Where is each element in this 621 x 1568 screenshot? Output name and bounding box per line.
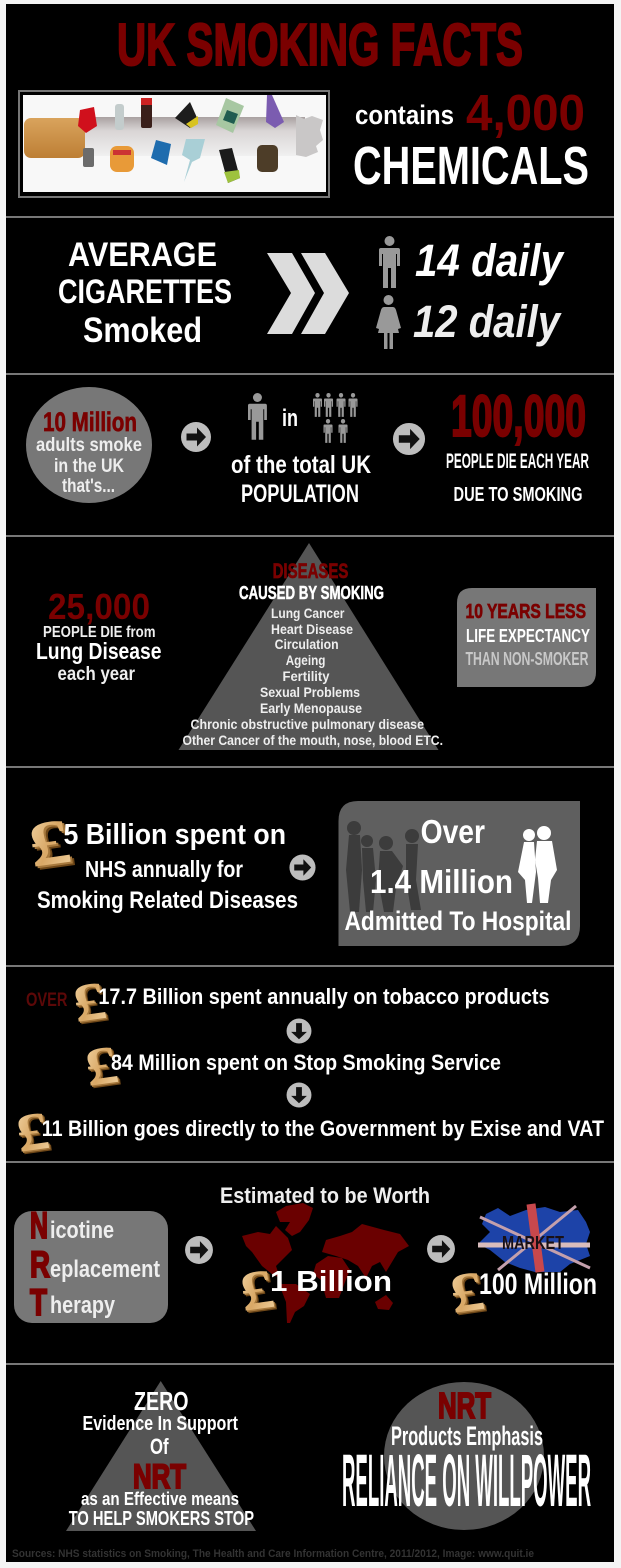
callout: reliance on willpower: NRT bbox=[438, 1385, 491, 1426]
triangle: zero evidence bbox=[66, 1381, 256, 1531]
triangle: diseases caused by smoking: Circulation bbox=[275, 636, 339, 652]
callout: nicotine replacement therapy: icotine bbox=[50, 1217, 114, 1244]
triangle: diseases caused by smoking: Lung Cancer bbox=[271, 605, 345, 621]
arrow: down bbox=[287, 1083, 311, 1107]
triangle: diseases caused by smoking: Sexual Problems bbox=[260, 684, 360, 700]
text: 17.7 billion on tobacco: 17.7 Billion spent annually on tobacco products bbox=[98, 984, 550, 1009]
panel: diseases bbox=[36, 543, 596, 750]
callout: reliance on willpower bbox=[342, 1382, 591, 1530]
icon: gold pound: £ bbox=[29, 809, 80, 885]
text: of the total UK population bbox=[231, 451, 371, 508]
callout: nicotine replacement therapy: eplacement bbox=[50, 1256, 160, 1283]
panel: NRT market bbox=[14, 1183, 597, 1329]
text: contains: contains bbox=[355, 100, 454, 130]
arrow bbox=[185, 1236, 213, 1264]
text: 84 million: 84 Million spent on Stop Smoking Service bbox=[111, 1050, 501, 1075]
text: sources: Sources: NHS statistics on Smoking, The Health and Care Information Centre, 2011/2012, Image: www.quit.ie bbox=[12, 1548, 534, 1560]
callout: admitted to hospital: Over bbox=[421, 813, 485, 850]
text: 4,000: 4,000 bbox=[466, 84, 585, 141]
arrow bbox=[289, 854, 316, 881]
panel: average cigarettes bbox=[58, 235, 565, 350]
text: 25,000 lung disease bbox=[36, 586, 162, 685]
callout: nicotine replacement therapy: N bbox=[30, 1205, 48, 1246]
arrow bbox=[393, 423, 425, 455]
text: 100,000 deaths bbox=[446, 384, 589, 506]
text: 5 billion spent bbox=[37, 819, 298, 914]
icon: gold pound: £ bbox=[12, 1100, 53, 1164]
icon: woman bbox=[376, 295, 401, 349]
callout: life expectancy bbox=[457, 588, 596, 687]
callout: nicotine replacement therapy: T bbox=[30, 1282, 47, 1323]
icon: gold pound: £ bbox=[83, 1035, 123, 1099]
icon: gold pound: £ bbox=[71, 971, 111, 1035]
callout: life expectancy: 10 YEARS LESS bbox=[466, 601, 586, 623]
icon: white couple bbox=[518, 826, 557, 903]
arrow: double chevron bbox=[267, 253, 349, 334]
text: average cigarettes smoked: Smoked bbox=[83, 311, 202, 350]
text: 5 billion spent: Smoking Related Diseases bbox=[37, 887, 298, 914]
icon: gold pound: £ bbox=[84, 1037, 125, 1100]
image: union flag market: MARKET bbox=[502, 1233, 564, 1253]
panel: chemicals bbox=[19, 84, 589, 197]
icon: dark silhouettes bbox=[346, 821, 421, 912]
icon: gold pound: £ bbox=[239, 1261, 281, 1326]
triangle: diseases caused by smoking: CAUSED BY SMOKING bbox=[239, 583, 384, 603]
text: 25,000 lung disease: Lung Disease bbox=[36, 638, 162, 664]
text: 25,000 lung disease: PEOPLE DIE from bbox=[43, 624, 156, 641]
callout: 10 million circle: that's... bbox=[62, 476, 115, 497]
triangle: diseases caused by smoking: Other Cancer of the mouth, nose, blood ETC. bbox=[182, 732, 443, 748]
triangle: diseases caused by smoking: DISEASES bbox=[273, 560, 348, 583]
text: average cigarettes smoked bbox=[58, 236, 232, 350]
image: union flag market bbox=[478, 1204, 590, 1272]
text: 12 daily: 12 daily bbox=[413, 296, 562, 347]
section dividers bbox=[6, 216, 614, 1365]
text: 5 billion spent: NHS annually for bbox=[85, 856, 243, 882]
panel: NHS spending bbox=[24, 801, 580, 946]
triangle: diseases caused by smoking: Fertility bbox=[282, 668, 330, 684]
triangle: diseases caused by smoking: Heart Disease bbox=[271, 621, 353, 637]
icon: one in seven people bbox=[248, 393, 358, 443]
text: average cigarettes smoked: CIGARETTES bbox=[58, 273, 232, 311]
triangle: diseases caused by smoking: Ageing bbox=[286, 652, 325, 668]
triangle: diseases caused by smoking bbox=[178, 543, 443, 750]
triangle: zero evidence: as an Effective means bbox=[81, 1489, 239, 1509]
callout: admitted to hospital: 1.4 Million bbox=[370, 863, 513, 900]
callout: 10 million circle: adults smoke bbox=[36, 435, 142, 456]
icon: gold pound: £ bbox=[238, 1259, 279, 1325]
map: world bbox=[242, 1203, 409, 1323]
triangle: diseases caused by smoking: Early Menopause bbox=[260, 700, 362, 716]
text: estimated to be worth: Estimated to be Worth bbox=[220, 1183, 430, 1208]
callout: 10 million circle: 10 Million bbox=[43, 407, 137, 437]
icon: man bbox=[379, 236, 400, 288]
text: over: OVER bbox=[26, 990, 68, 1011]
text: of the total UK population: POPULATION bbox=[241, 480, 359, 508]
triangle: zero evidence: TO HELP SMOKERS STOP bbox=[69, 1508, 254, 1530]
icon: gold pound: £ bbox=[81, 1034, 122, 1098]
icon: gold pound: £ bbox=[72, 973, 113, 1036]
icon: gold pound: £ bbox=[449, 1263, 491, 1328]
text: 1 billion: 1 Billion bbox=[270, 1266, 392, 1298]
icon: gold pound: £ bbox=[24, 806, 75, 882]
panel: annual spending flow bbox=[12, 970, 604, 1167]
triangle: zero evidence: ZERO bbox=[134, 1386, 188, 1416]
text: 25,000 lung disease: 25,000 bbox=[48, 586, 150, 627]
text: 25,000 lung disease: each year bbox=[58, 664, 136, 685]
text: 14 daily: 14 daily bbox=[415, 235, 565, 286]
text: 5 billion spent: 5 Billion spent on bbox=[64, 819, 286, 851]
callout: 10 million circle bbox=[26, 387, 152, 503]
icon: gold pound: £ bbox=[14, 1101, 54, 1165]
triangle: zero evidence: NRT bbox=[133, 1458, 186, 1496]
callout: nicotine replacement therapy: R bbox=[30, 1244, 50, 1285]
panel: NRT evidence bbox=[12, 1381, 591, 1560]
text: average cigarettes smoked: AVERAGE bbox=[68, 236, 217, 274]
triangle: zero evidence: Of bbox=[150, 1434, 169, 1459]
arrow bbox=[427, 1235, 455, 1263]
icon: gold pound: £ bbox=[446, 1260, 488, 1326]
callout: 10 million circle: in the UK bbox=[54, 456, 124, 477]
triangle: diseases caused by smoking: Chronic obstructive pulmonary disease bbox=[190, 716, 424, 732]
callout: admitted to hospital bbox=[338, 801, 580, 946]
icon: gold pound: £ bbox=[15, 1103, 56, 1166]
panel: population bbox=[26, 384, 589, 508]
text: of the total UK population: of the total UK bbox=[231, 451, 371, 479]
arrow bbox=[181, 422, 211, 452]
icon: gold pound: £ bbox=[448, 1261, 489, 1327]
callout: nicotine replacement therapy: herapy bbox=[50, 1292, 116, 1319]
arrow: down bbox=[287, 1019, 311, 1043]
icon: gold pound: £ bbox=[236, 1258, 278, 1324]
triangle: zero evidence: Evidence In Support bbox=[82, 1413, 238, 1435]
icon: gold pound: £ bbox=[26, 807, 77, 883]
icon: one in seven people: in bbox=[282, 405, 298, 432]
image: cigarette with chemical products bbox=[19, 91, 329, 197]
icon: gold pound: £ bbox=[69, 970, 110, 1034]
callout: admitted to hospital: Admitted To Hospital bbox=[344, 906, 572, 936]
callout: nicotine replacement therapy bbox=[14, 1205, 168, 1323]
